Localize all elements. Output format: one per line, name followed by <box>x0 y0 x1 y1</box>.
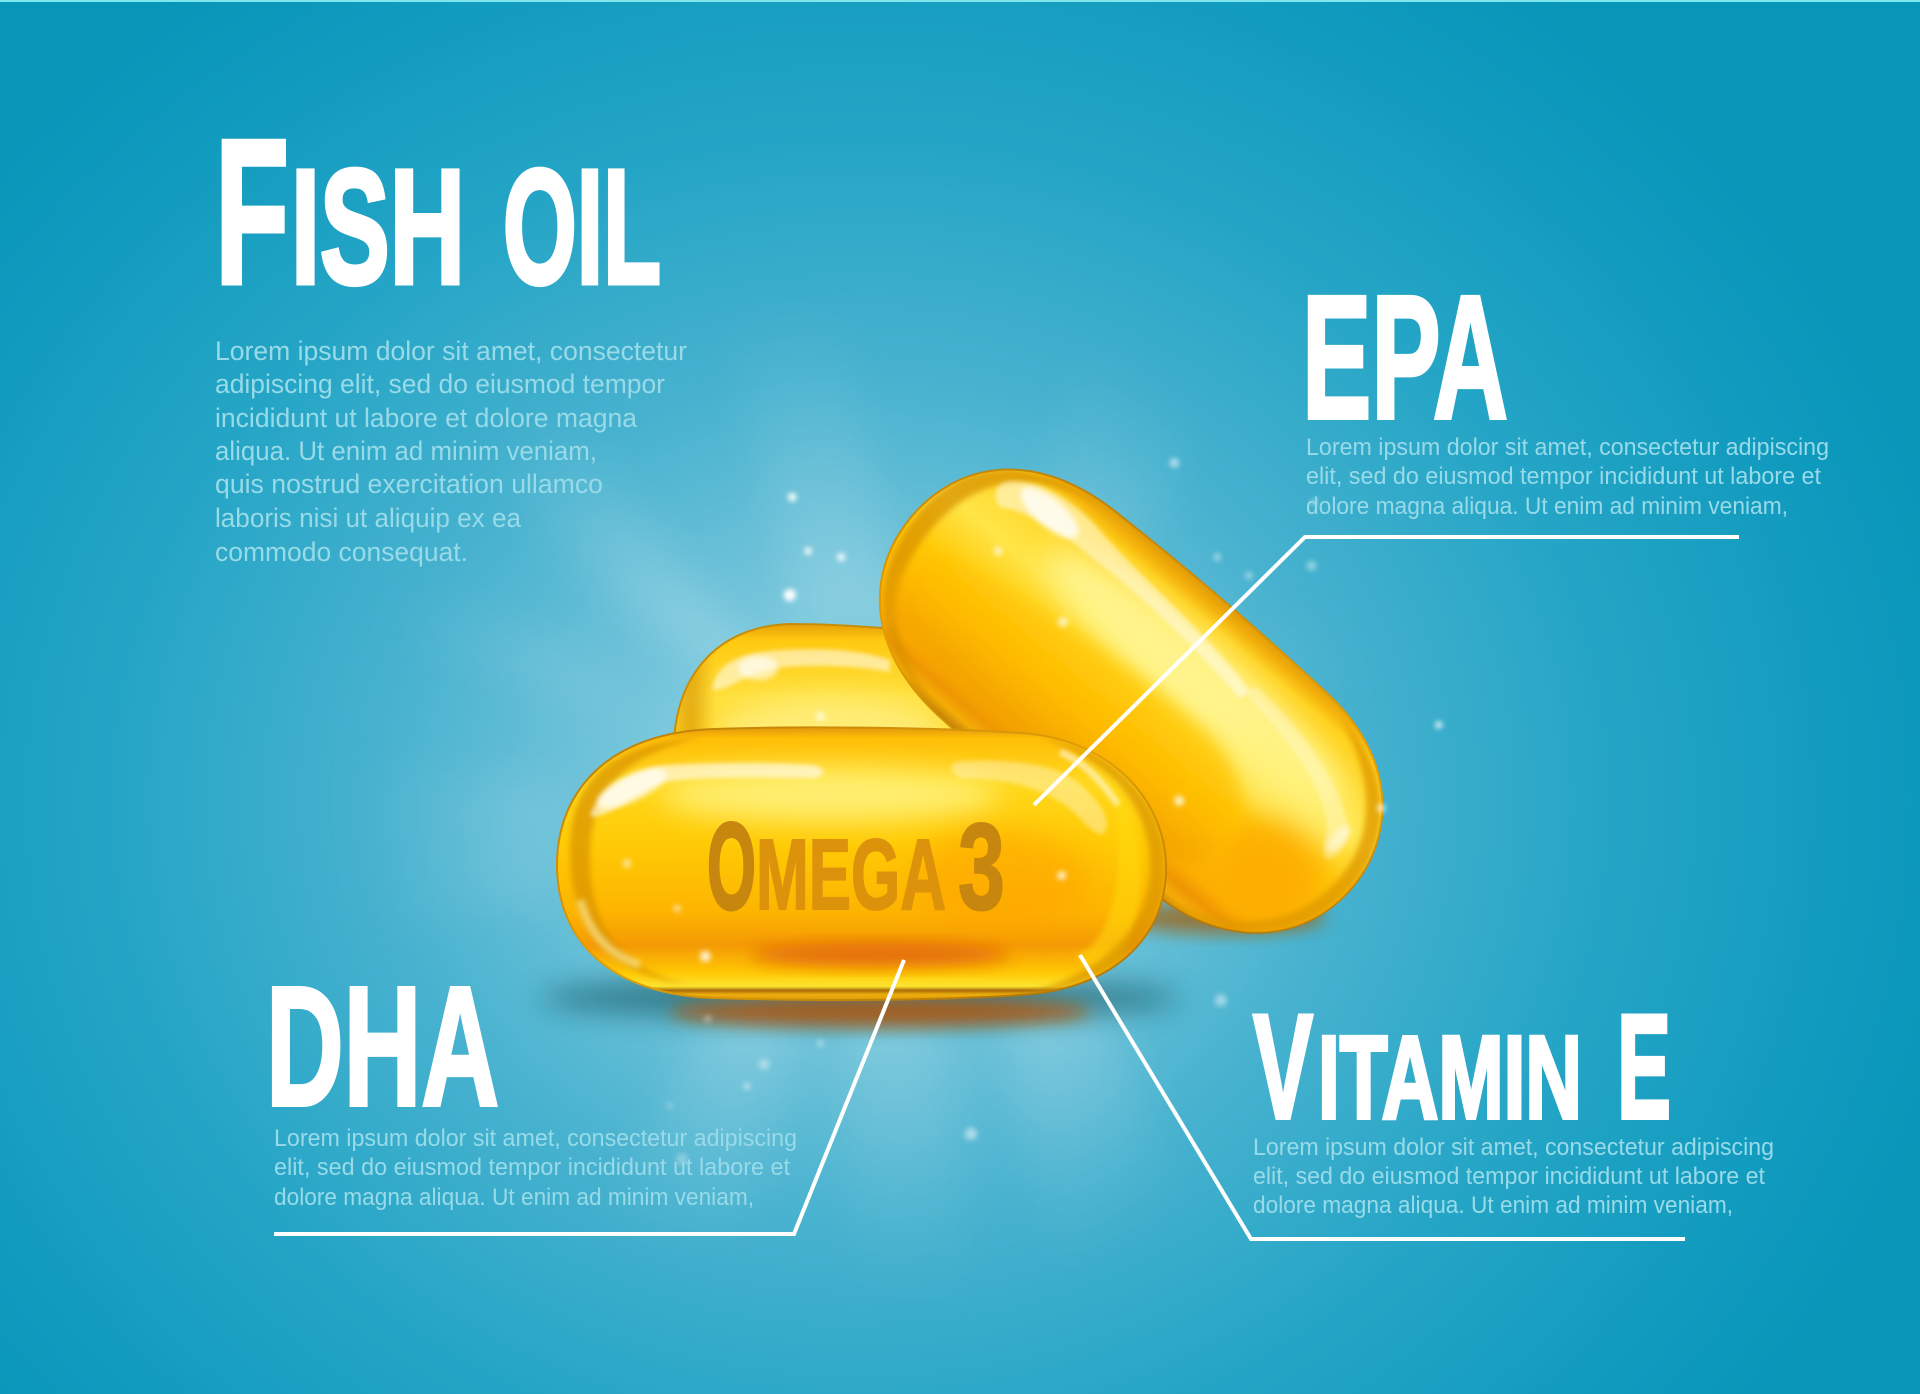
text block: intro: incididunt ut labore et dolore magna <box>215 403 638 433</box>
light rays <box>200 270 1620 1340</box>
capsule label: Omega 3 <box>707 799 1005 936</box>
text block: intro: commodo consequat. <box>215 537 468 567</box>
heading: DHA: DHA <box>266 952 499 1142</box>
text block: Vitamin E: dolore magna aliqua. Ut enim ad minim veniam, <box>1253 1192 1733 1219</box>
text block: Vitamin E <box>1253 1134 1774 1219</box>
text block: DHA: dolore magna aliqua. Ut enim ad minim veniam, <box>274 1184 754 1211</box>
text block: DHA <box>274 1125 797 1211</box>
text block: intro: aliqua. Ut enim ad minim veniam, <box>215 436 597 466</box>
text block: DHA: elit, sed do eiusmod tempor incididunt ut labore et <box>274 1154 790 1181</box>
title: Fish oil: F <box>215 97 289 327</box>
text block: Vitamin E: elit, sed do eiusmod tempor incididunt ut labore et <box>1253 1163 1765 1190</box>
text block: DHA: Lorem ipsum dolor sit amet, consectetur adipiscing <box>274 1125 797 1152</box>
text block: EPA: Lorem ipsum dolor sit amet, consectetur adipiscing <box>1306 434 1829 461</box>
heading: EPA: EPA <box>1302 260 1508 456</box>
heading: Vitamin E: E <box>1617 983 1671 1150</box>
heading: Vitamin E: V <box>1253 983 1313 1150</box>
capsule label: Omega 3: MEGA <box>756 819 946 931</box>
text block: intro: laboris nisi ut aliquip ex ea <box>215 503 522 533</box>
text block: EPA <box>1306 434 1829 520</box>
title: Fish oil: ISH <box>291 135 465 318</box>
text block: intro: Lorem ipsum dolor sit amet, consectetur <box>215 336 687 366</box>
capsule label: Omega 3: 3 <box>958 799 1005 936</box>
text block: intro <box>215 336 687 567</box>
text block: Vitamin E: Lorem ipsum dolor sit amet, consectetur adipiscing <box>1253 1134 1774 1161</box>
capsule: back right <box>878 468 1384 934</box>
title: Fish oil: OIL <box>503 135 661 318</box>
capsule label: Omega 3: O <box>707 799 756 936</box>
heading: Vitamin E: ITAMIN <box>1318 1012 1582 1144</box>
capsule: back left <box>674 623 952 732</box>
capsule shadows <box>540 902 1325 1027</box>
sparkles <box>623 458 1442 1166</box>
callout line: DHA <box>274 960 904 1234</box>
text block: intro: adipiscing elit, sed do eiusmod tempor <box>215 369 665 399</box>
text block: EPA: dolore magna aliqua. Ut enim ad minim veniam, <box>1306 493 1788 520</box>
callout line: EPA <box>1034 537 1739 805</box>
text block: intro: quis nostrud exercitation ullamco <box>215 469 603 499</box>
heading: Vitamin E <box>1253 983 1671 1150</box>
title: Fish oil <box>215 97 661 327</box>
callout line: Vitamin E <box>1080 955 1685 1239</box>
text block: EPA: elit, sed do eiusmod tempor incididunt ut labore et <box>1306 463 1821 490</box>
capsule: front <box>557 727 1166 1000</box>
